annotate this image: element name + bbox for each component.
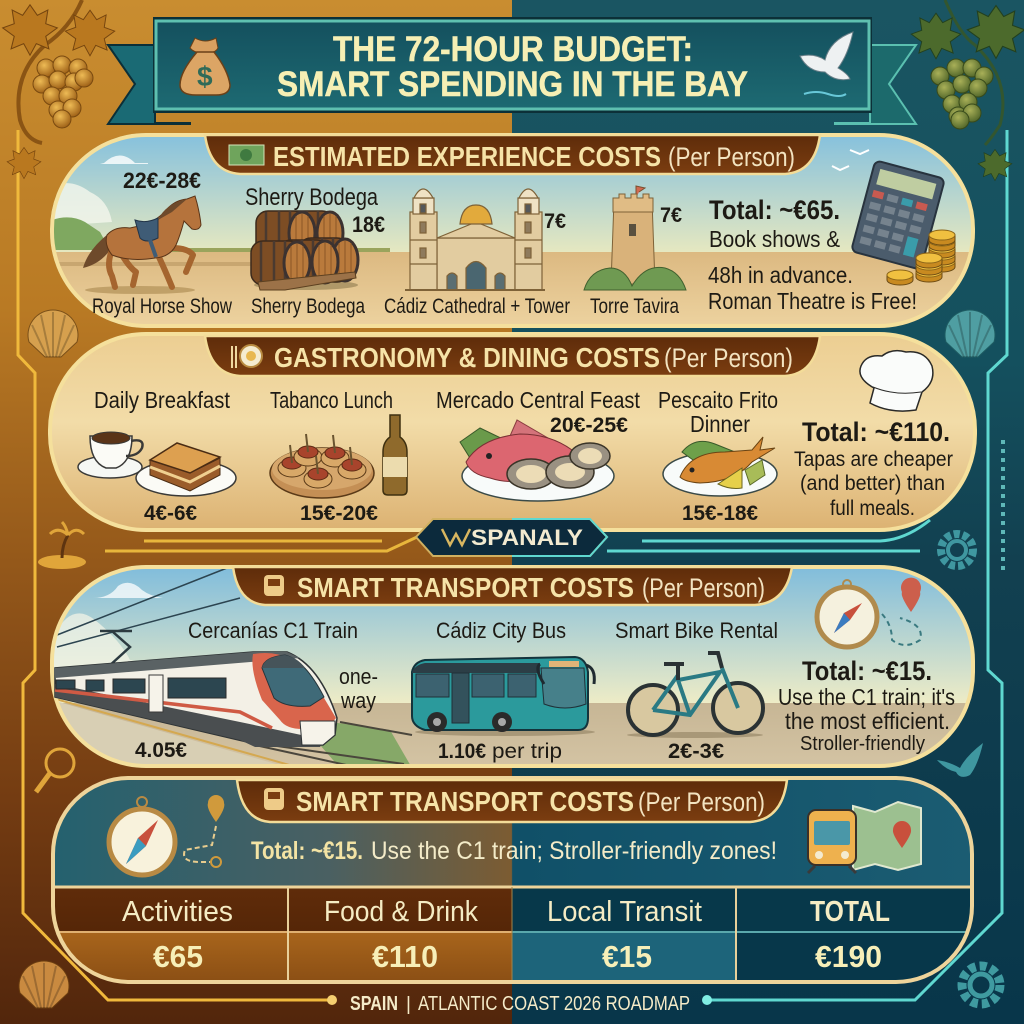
table values <box>153 939 882 974</box>
total note: transport: the most efficient. <box>785 708 950 734</box>
icon: seagull <box>800 32 853 96</box>
header tab: (Per Person) <box>642 573 765 603</box>
header tab <box>233 567 792 605</box>
total note: transport: Total: ~€15. <box>802 656 932 686</box>
icon: magnifier <box>36 749 74 792</box>
header tab <box>237 780 787 822</box>
icon: gear bottom right <box>962 966 1000 1004</box>
badge: spanaly <box>416 519 607 556</box>
icon: torre tavira <box>584 186 686 290</box>
icon: sherry barrels <box>251 211 358 290</box>
badge: spanaly: SPANALY <box>471 525 583 550</box>
table headers: Local Transit <box>547 896 702 928</box>
title text: THE 72-HOUR BUDGET: <box>333 30 693 69</box>
scene sky, ground and wires <box>50 565 975 769</box>
header tab <box>205 336 820 376</box>
icon: tapas board and bottle <box>270 415 407 498</box>
icon: palm island <box>38 522 86 569</box>
table headers <box>122 896 890 928</box>
total note: dining: Total: ~€110. <box>802 417 950 447</box>
labels: meals: Pescaito Frito <box>658 387 778 413</box>
label: one-way: way <box>340 688 376 713</box>
price: torre tavira: 7€ <box>660 204 682 227</box>
labels under scene: Sherry Bodega <box>251 295 365 318</box>
icon: chef hat <box>860 351 933 411</box>
price: sherry: 18€ <box>352 212 385 237</box>
header tab: GASTRONOMY & DINING COSTS <box>274 342 660 373</box>
vine and grapes: top left <box>3 0 115 179</box>
label: bike price: 2€-3€ <box>668 740 724 763</box>
label: bus price <box>438 740 562 763</box>
total note: summary: Use the C1 train; Stroller-friendly zones! <box>371 837 777 865</box>
labels under scene: Royal Horse Show <box>92 295 233 318</box>
labels: meals: Daily Breakfast <box>94 387 231 413</box>
table values: €110 <box>372 939 438 974</box>
label: bus price: per trip <box>492 740 562 763</box>
vine and grapes: top right <box>911 0 1024 181</box>
icon: coffee cup and toast <box>78 432 236 496</box>
labels under scene <box>92 295 679 318</box>
icon: gear right <box>941 534 973 566</box>
labels: meals: Tabanco Lunch <box>270 387 393 413</box>
labels under scene: Cádiz Cathedral + Tower <box>384 295 570 318</box>
header tab: (Per Person) <box>668 142 795 172</box>
label: one-way: one- <box>339 664 378 689</box>
panel: estimated experience costs <box>50 133 975 328</box>
label: bike: Smart Bike Rental <box>615 618 778 643</box>
total note: dining: (and better) than <box>800 472 945 495</box>
table values: €65 <box>153 939 203 974</box>
panel: smart transport costs <box>50 565 975 769</box>
icon: fried fish plate <box>663 437 777 496</box>
icon: bicycle <box>627 653 763 738</box>
price: horse show: 22€-28€ <box>123 168 201 193</box>
icon: horse <box>83 196 201 294</box>
footer: | <box>406 994 411 1015</box>
label: sherry bodega top: Sherry Bodega <box>245 184 379 211</box>
total note: transport: Use the C1 train; it's <box>778 684 955 710</box>
panel: gastronomy and dining costs <box>50 334 975 530</box>
price: cathedral: 7€ <box>544 210 566 233</box>
total note: experiences <box>708 195 917 314</box>
table values: €190 <box>815 939 882 974</box>
labels under scene: Torre Tavira <box>590 295 679 318</box>
table headers: Activities <box>122 896 233 928</box>
label: one-way <box>339 664 378 713</box>
total note: transport: Stroller-friendly <box>800 733 925 755</box>
shells beside panels <box>19 310 995 1008</box>
header tab: SMART TRANSPORT COSTS <box>296 786 634 817</box>
prices: meals: 4€-6€ <box>144 502 197 525</box>
prices: meals: 15€-20€ <box>300 502 378 525</box>
footer: SPAIN <box>350 993 398 1015</box>
table headers: TOTAL <box>810 896 890 928</box>
panel: summary <box>52 777 973 984</box>
total note: transport <box>778 656 955 755</box>
header tab: ESTIMATED EXPERIENCE COSTS <box>273 141 661 172</box>
footer: ATLANTIC COAST 2026 ROADMAP <box>418 993 690 1015</box>
header tab: (Per Person) <box>664 343 793 373</box>
labels: meals <box>94 387 778 437</box>
icon: compass and pin <box>817 578 921 647</box>
header tab: (Per Person) <box>638 787 765 817</box>
title text <box>277 30 748 104</box>
prices: meals <box>144 502 758 525</box>
table headers: Food & Drink <box>324 896 478 928</box>
label: bus price: 1.10€ <box>438 740 486 763</box>
icon: small seagull <box>937 743 983 777</box>
table values: €15 <box>602 939 652 974</box>
icon: fish and oysters plate <box>460 420 614 501</box>
label: bus: Cádiz City Bus <box>436 618 566 643</box>
icon: compass with route <box>109 795 224 875</box>
total note: summary: Total: ~€15. <box>251 837 363 865</box>
header tab: SMART TRANSPORT COSTS <box>297 572 634 603</box>
total note: dining: full meals. <box>830 497 915 520</box>
scene: sky and sand <box>50 135 975 328</box>
total note: dining: Tapas are cheaper <box>794 448 953 471</box>
total note: dining <box>794 417 953 520</box>
icon: train and map <box>808 802 921 873</box>
icon: money bag <box>180 38 230 95</box>
header tab <box>205 135 820 174</box>
labels: meals: Mercado Central Feast <box>436 387 641 413</box>
total note: experiences: Total: ~€65. <box>709 195 840 225</box>
label: train price: 4.05€ <box>135 739 187 762</box>
total note: experiences: Roman Theatre is Free! <box>708 288 917 314</box>
icon: city bus <box>412 657 595 736</box>
price: mercado: 20€-25€ <box>550 414 628 437</box>
icon: calculator with coins <box>851 160 955 285</box>
label: train: Cercanías C1 Train <box>188 618 358 643</box>
icon: money bag: $ <box>197 61 213 92</box>
summary table <box>52 887 973 984</box>
total note: experiences: 48h in advance. <box>708 262 853 288</box>
labels: meals: Dinner <box>690 411 750 437</box>
title ribbon <box>108 17 916 124</box>
icon: cathedral <box>405 189 545 290</box>
icon: commuter train <box>55 631 337 747</box>
total note: experiences: Book shows & <box>709 226 840 252</box>
prices: meals: 15€-18€ <box>682 502 758 525</box>
title text: SMART SPENDING IN THE BAY <box>277 65 748 104</box>
